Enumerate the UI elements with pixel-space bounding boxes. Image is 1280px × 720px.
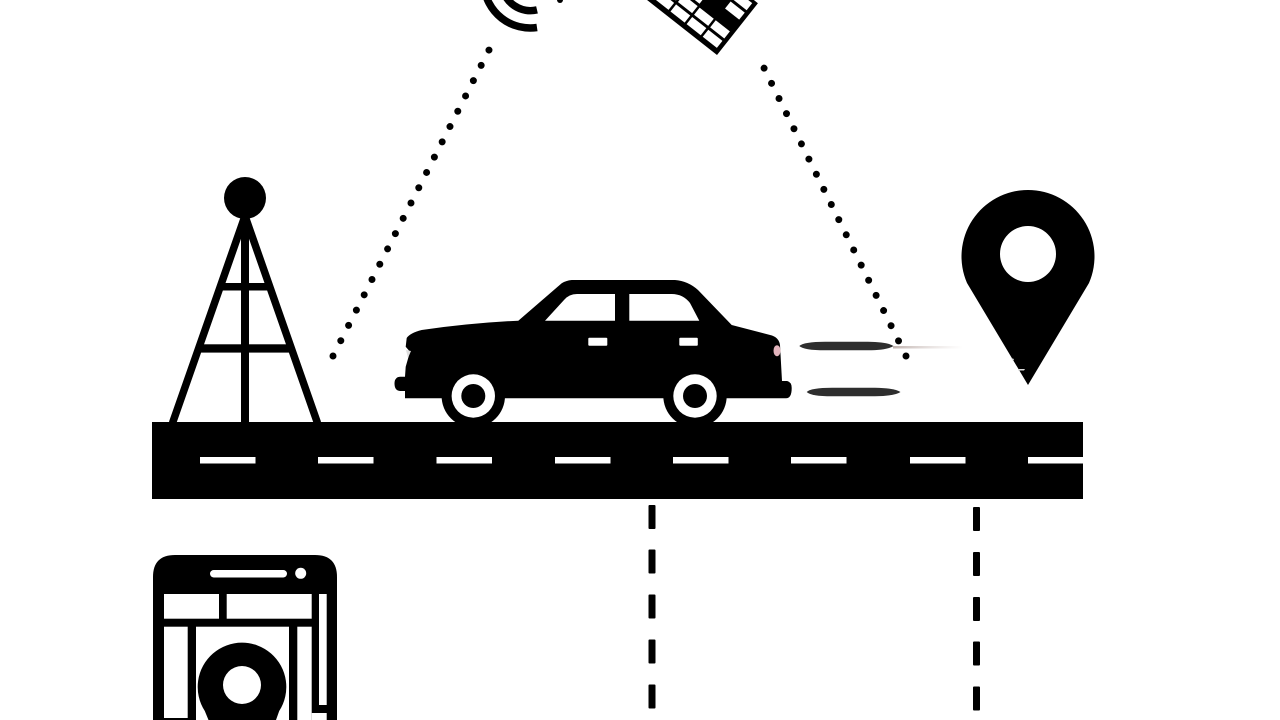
icon: car <box>394 280 792 428</box>
road <box>152 422 1083 499</box>
icon: radio tower <box>172 177 318 423</box>
dotted signal line: satellite to tower <box>333 50 489 356</box>
car speed lines <box>799 342 963 396</box>
dotted signal line: satellite to car <box>764 68 906 356</box>
icon: satellite solar panel <box>632 0 758 55</box>
dashed connector line: right <box>973 507 980 710</box>
icon: smartphone with map <box>153 555 337 720</box>
map pin on phone screen <box>198 643 286 720</box>
dashed connector line: left <box>648 505 656 708</box>
icon: satellite signal arcs <box>484 0 563 28</box>
icon: location pin <box>961 190 1094 385</box>
